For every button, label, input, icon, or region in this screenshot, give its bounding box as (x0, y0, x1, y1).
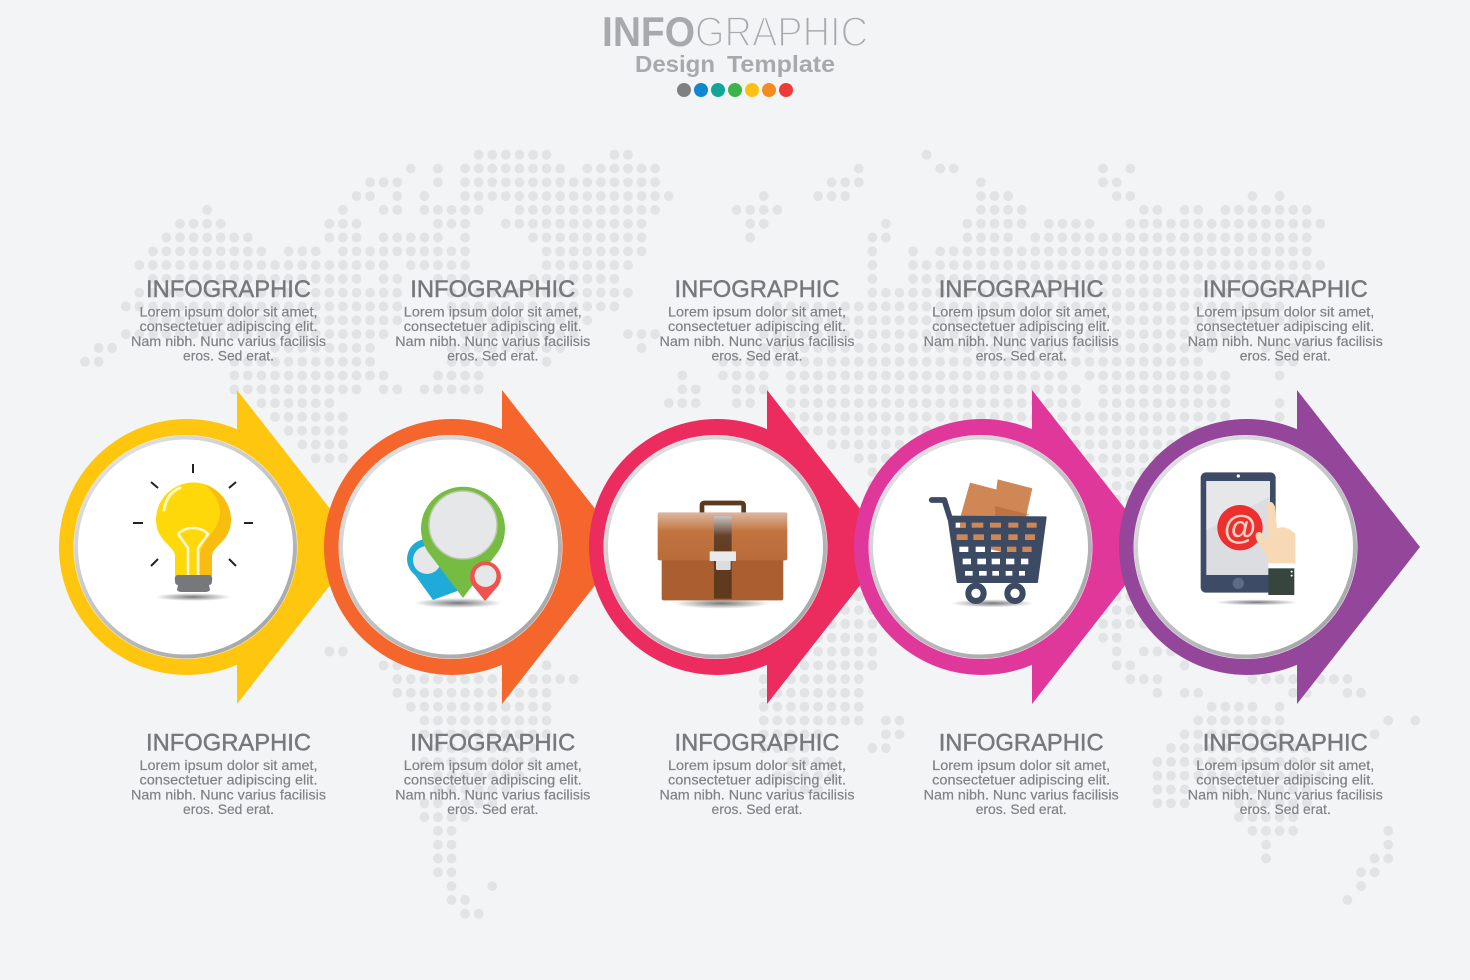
text block: bottom 2: eros. Sed erat. (447, 801, 538, 817)
step 5: purple arrow circle (1119, 390, 1420, 704)
text block: bottom 2: INFOGRAPHIC (410, 730, 575, 756)
text block: bottom 2: Lorem ipsum dolor sit amet, (404, 757, 582, 773)
text block: bottom 1 (131, 730, 326, 817)
text block: bottom 3: Nam nibh. Nunc varius facilisis (660, 786, 854, 802)
header title: GRAPHIC (695, 8, 868, 55)
text block: top 5: INFOGRAPHIC (1203, 276, 1368, 303)
text block: bottom 4: INFOGRAPHIC (939, 730, 1104, 756)
text block: top 3: eros. Sed erat. (712, 348, 802, 364)
text block: bottom 4: eros. Sed erat. (976, 801, 1067, 817)
step 2: orange arrow circle (324, 390, 625, 704)
text block: bottom 1: Lorem ipsum dolor sit amet, (140, 757, 318, 773)
text block: top 4: Nam nibh. Nunc varius facilisis (924, 333, 1119, 349)
text block: top 2: INFOGRAPHIC (410, 276, 575, 303)
step 3: red-pink arrow circle (589, 390, 890, 704)
dotted world map (85, 155, 1415, 914)
text block: bottom 4 (924, 730, 1119, 817)
text block: top 5: eros. Sed erat. (1240, 348, 1331, 364)
text block: bottom 4: consectetuer adipiscing elit. (932, 772, 1110, 788)
text block: bottom 3: INFOGRAPHIC (674, 730, 840, 756)
text block: bottom 5: eros. Sed erat. (1240, 801, 1331, 817)
step 4: magenta arrow circle (854, 390, 1155, 704)
text block: top 4: consectetuer adipiscing elit. (932, 318, 1110, 334)
text block: top 5: Nam nibh. Nunc varius facilisis (1188, 333, 1383, 349)
text block: top 5: consectetuer adipiscing elit. (1196, 318, 1374, 334)
text block: top 1: eros. Sed erat. (183, 348, 274, 364)
icon: location pins (407, 487, 505, 608)
text block: bottom 5 (1188, 730, 1383, 817)
header subtitle: Template (727, 51, 835, 77)
text block: top 4 (924, 276, 1119, 364)
header subtitle (635, 51, 835, 77)
text block: bottom 1: INFOGRAPHIC (146, 730, 311, 756)
text block: top 3: Lorem ipsum dolor sit amet, (668, 304, 846, 320)
text block: top 2: consectetuer adipiscing elit. (404, 318, 582, 334)
text block: bottom 3 (660, 730, 854, 817)
step 1: yellow arrow circle (59, 390, 360, 704)
text block: top 4: Lorem ipsum dolor sit amet, (932, 304, 1110, 320)
text block: bottom 5: Nam nibh. Nunc varius facilisis (1188, 786, 1383, 802)
icon: briefcase (658, 503, 787, 609)
text block: bottom 4: Nam nibh. Nunc varius facilisis (924, 786, 1119, 802)
text block: top 1: Nam nibh. Nunc varius facilisis (131, 333, 326, 349)
text block: bottom 1: Nam nibh. Nunc varius facilisis (131, 786, 326, 802)
text block: top 3: Nam nibh. Nunc varius facilisis (660, 333, 854, 349)
text block: top 4: eros. Sed erat. (976, 348, 1067, 364)
text block: top 1: INFOGRAPHIC (146, 276, 311, 303)
text block: top 3: consectetuer adipiscing elit. (668, 318, 846, 334)
text block: bottom 2: Nam nibh. Nunc varius facilisis (395, 786, 590, 802)
text block: top 5: Lorem ipsum dolor sit amet, (1196, 304, 1374, 320)
text block: top 5 (1188, 276, 1383, 364)
text block: top 3: INFOGRAPHIC (674, 276, 840, 303)
text block: bottom 5: INFOGRAPHIC (1203, 730, 1368, 756)
text block: bottom 1: eros. Sed erat. (183, 801, 274, 817)
colour dots row (677, 83, 793, 97)
icon: tablet with at sign and hand: @ (1224, 510, 1256, 547)
text block: bottom 5: Lorem ipsum dolor sit amet, (1196, 757, 1374, 773)
text block: top 2: Nam nibh. Nunc varius facilisis (395, 333, 590, 349)
icon: shopping cart (932, 479, 1046, 607)
text block: bottom 3: Lorem ipsum dolor sit amet, (668, 757, 846, 773)
header title: INFO (602, 8, 695, 55)
text block: bottom 2: consectetuer adipiscing elit. (404, 772, 582, 788)
icon: tablet with at sign and hand (1201, 472, 1298, 605)
text block: top 2: Lorem ipsum dolor sit amet, (404, 304, 582, 320)
text block: bottom 3: eros. Sed erat. (712, 801, 802, 817)
text block: bottom 2 (395, 730, 590, 817)
text block: bottom 4: Lorem ipsum dolor sit amet, (932, 757, 1110, 773)
text block: top 1 (131, 276, 326, 364)
text block: top 4: INFOGRAPHIC (939, 276, 1104, 303)
header title (602, 8, 868, 55)
text block: top 2: eros. Sed erat. (447, 348, 538, 364)
text block: top 1: Lorem ipsum dolor sit amet, (140, 304, 318, 320)
text block: bottom 5: consectetuer adipiscing elit. (1196, 772, 1374, 788)
icon: light bulb (133, 464, 253, 601)
text block: top 2 (395, 276, 590, 364)
text block: top 1: consectetuer adipiscing elit. (140, 318, 318, 334)
text block: bottom 3: consectetuer adipiscing elit. (668, 772, 846, 788)
header subtitle: Design (635, 51, 715, 77)
text block: top 3 (660, 276, 854, 364)
text block: bottom 1: consectetuer adipiscing elit. (140, 772, 318, 788)
